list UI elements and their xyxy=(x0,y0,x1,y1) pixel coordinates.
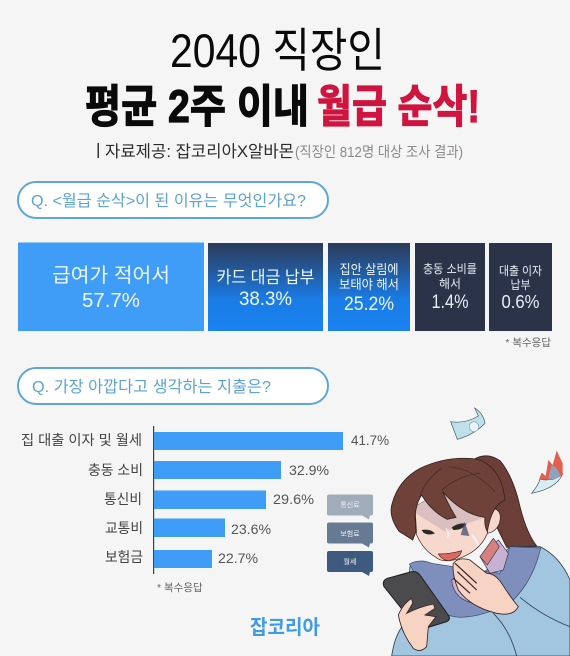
block: loan interest: 0.6% xyxy=(502,292,540,312)
source line xyxy=(98,142,463,161)
bar: housing xyxy=(21,432,389,450)
block: household xyxy=(328,243,410,331)
note: multiple answers 2: * 복수응답 xyxy=(157,582,203,594)
forehead shadow xyxy=(415,490,487,532)
bar: telecom: 통신비 xyxy=(104,491,142,507)
hair strands xyxy=(420,467,495,497)
bar: impulse: 충동 소비 xyxy=(88,462,143,478)
bar: housing: 집 대출 이자 및 월세 xyxy=(21,432,142,448)
source line: (직장인 812명 대상 조사 결과) xyxy=(295,144,463,161)
block: low salary: 급여가 적어서 xyxy=(52,264,170,287)
block: loan interest xyxy=(489,243,552,331)
bar: housing: 41.7% xyxy=(351,432,389,448)
block: household: 집안 살림에 xyxy=(340,262,398,277)
block: impulse: 해서 xyxy=(439,277,461,291)
mouth xyxy=(438,551,462,561)
bar: transport: 교통비 xyxy=(105,520,143,536)
logo: JobKorea: 잡코리아 xyxy=(250,616,320,639)
block: card payment xyxy=(208,243,323,331)
bar: transport: 23.6% xyxy=(231,521,271,537)
bubble: telecom fee: 통신료 xyxy=(340,500,360,509)
treemap: reasons xyxy=(18,242,552,331)
title: 월급 순삭! xyxy=(317,81,480,132)
bubble: rent: 월세 xyxy=(344,557,356,566)
speech bubbles xyxy=(327,494,373,576)
vest xyxy=(409,547,541,617)
bar: impulse xyxy=(88,461,329,479)
icon: flying banknote xyxy=(451,408,485,439)
phone xyxy=(383,571,449,629)
block: household: 보태야 해서 xyxy=(339,277,399,292)
block: low salary: 57.7% xyxy=(82,290,140,312)
icon: burning banknote xyxy=(532,451,563,493)
holding hand xyxy=(398,598,436,650)
title: 2040 직장인 xyxy=(170,24,385,77)
sleeve fold xyxy=(493,597,570,656)
collar and neck xyxy=(480,540,508,573)
bar: impulse: 32.9% xyxy=(289,462,329,478)
block: household: 25.2% xyxy=(344,294,394,315)
illustration: worried woman with phone xyxy=(383,408,570,656)
block: impulse: 1.4% xyxy=(432,292,469,313)
question pill 1 xyxy=(18,182,328,218)
raised hand xyxy=(453,559,518,614)
ponytail xyxy=(474,456,537,547)
bar: telecom: 29.6% xyxy=(273,491,314,507)
block: impulse xyxy=(415,243,485,331)
block: low salary xyxy=(18,242,204,331)
question pill 2 xyxy=(18,368,328,404)
ear xyxy=(487,509,500,533)
bar: transport xyxy=(105,518,271,537)
bubble: insurance fee: 보험료 xyxy=(340,530,360,538)
bar: insurance: 보험금 xyxy=(105,549,143,565)
block: card payment: 카드 대금 납부 xyxy=(216,268,314,287)
block: card payment: 38.3% xyxy=(239,289,292,310)
title xyxy=(85,24,480,132)
face xyxy=(415,490,487,561)
source line: 자료제공: 잡코리아X알바몬 xyxy=(105,142,294,161)
question pill 2: Q. 가장 아깝다고 생각하는 지출은? xyxy=(32,378,271,396)
note: multiple answers 1: * 복수응답 xyxy=(505,337,551,349)
block: loan interest: 대출 이자 xyxy=(499,264,542,278)
bar: insurance xyxy=(105,549,258,568)
hair front xyxy=(391,458,505,540)
sweater xyxy=(392,547,570,656)
block: impulse: 충동 소비를 xyxy=(423,262,477,276)
block: loan interest: 납부 xyxy=(510,278,530,292)
bar chart: wasted expenses xyxy=(21,426,389,574)
bar: insurance: 22.7% xyxy=(218,550,258,566)
title: 평균 2주 이내 xyxy=(85,81,309,132)
eyes and tears xyxy=(422,522,478,546)
question pill 1: Q. <월급 순삭>이 된 이유는 무엇인가요? xyxy=(31,192,306,210)
bar: telecom xyxy=(104,490,314,509)
